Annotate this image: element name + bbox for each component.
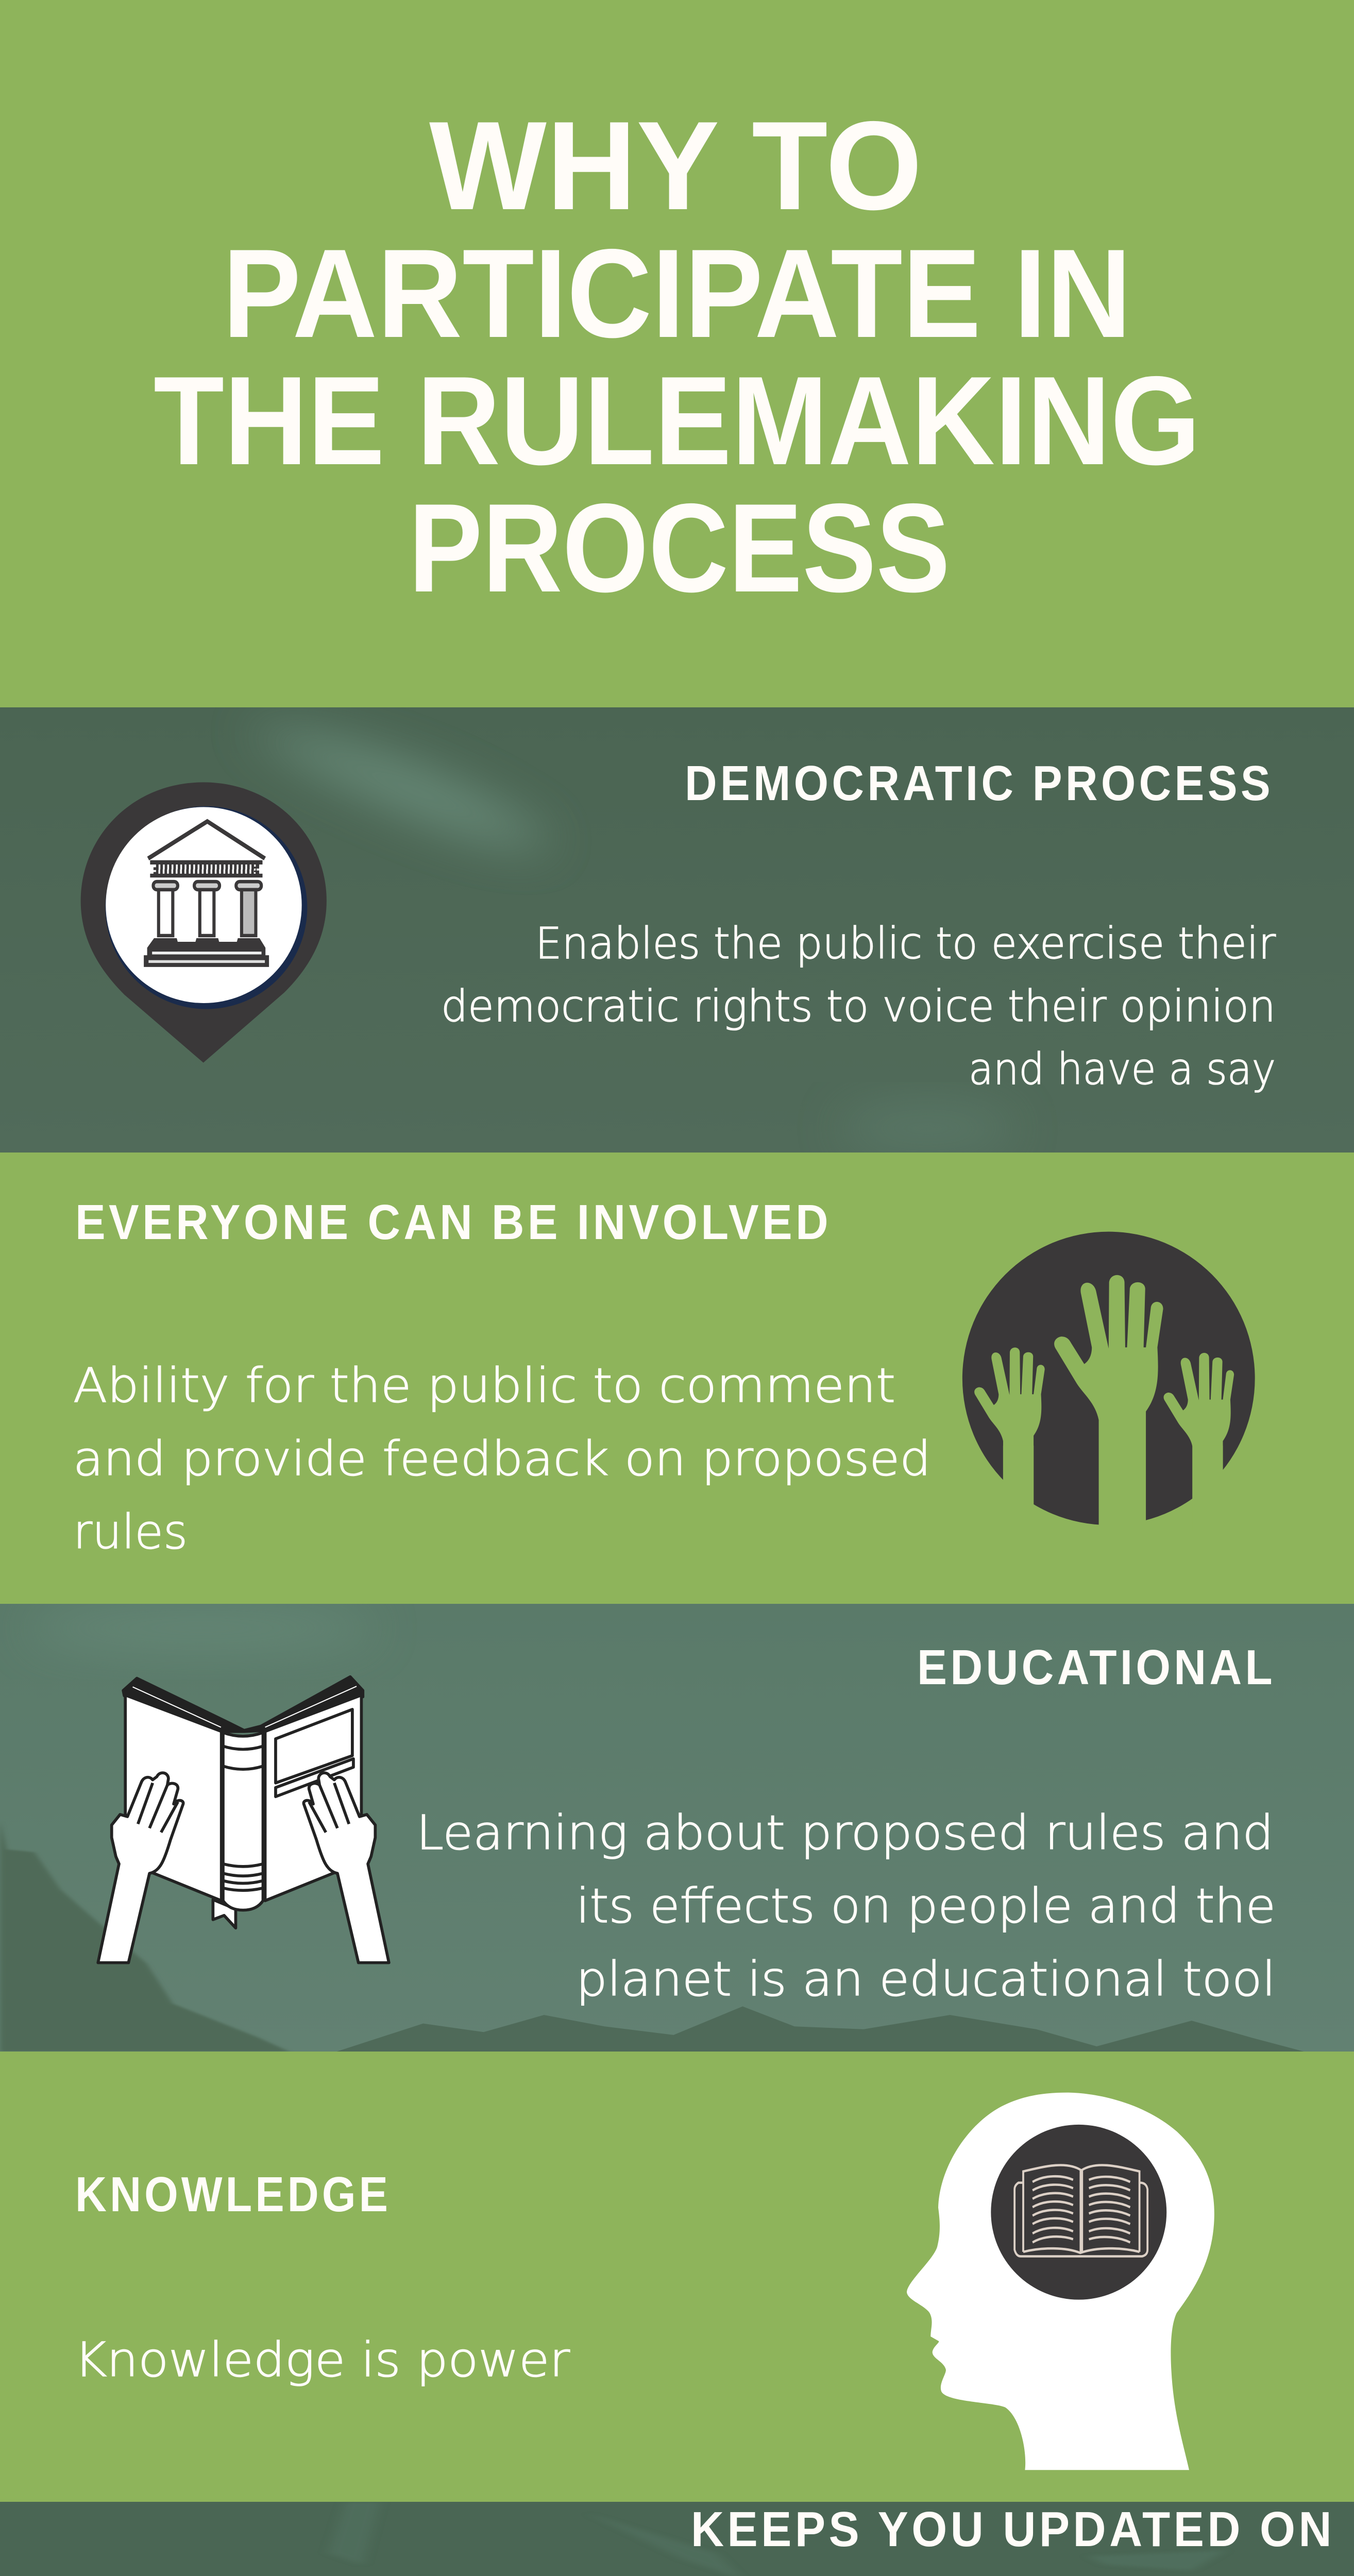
panel: knowledge (74, 2093, 1214, 2470)
body text: educational: planet is an educational tool (576, 1952, 1276, 2007)
heading: knowledge: KNOWLEDGE (75, 2167, 391, 2222)
body text: everyone can be involved: Ability for the public to comment (73, 1358, 895, 1413)
body text: democratic process: Enables the public to exercise their (535, 918, 1276, 969)
icon: raised hands (962, 1232, 1255, 1531)
panel: educational (0, 1602, 1354, 2052)
heading: everyone can be involved: EVERYONE CAN BE INVOLVED (75, 1195, 832, 1250)
title: PARTICIPATE IN (223, 223, 1131, 364)
body text: educational: its effects on people and the (576, 1878, 1276, 1934)
title: PROCESS (409, 477, 950, 618)
title (154, 95, 1200, 618)
body text: educational (416, 1805, 1276, 2007)
body text: democratic process: and have a say (969, 1044, 1276, 1094)
body text: educational: Learning about proposed rules and (416, 1805, 1274, 1860)
panel: democratic process (0, 707, 1354, 1153)
panel: title (154, 95, 1200, 618)
body text: democratic process: democratic rights to voice their opinion (441, 981, 1276, 1031)
heading: democratic process: DEMOCRATIC PROCESS (685, 756, 1274, 811)
heading: educational: EDUCATIONAL (917, 1640, 1276, 1695)
body text: everyone can be involved: and provide feedback on proposed (73, 1431, 931, 1486)
body text: knowledge: Knowledge is power (74, 2332, 570, 2387)
panel: keeps you updated (0, 2502, 1354, 2576)
icon: map pin with temple (81, 782, 327, 1063)
body text: democratic process (441, 918, 1276, 1094)
title: THE RULEMAKING (154, 350, 1200, 491)
icon: hands holding open book (98, 1677, 389, 1963)
title: WHY TO (429, 95, 922, 236)
icon: head with book (907, 2093, 1214, 2470)
body text: everyone can be involved (73, 1358, 931, 1560)
panel: everyone can be involved (73, 1195, 1255, 1560)
body text: everyone can be involved: rules (73, 1504, 188, 1560)
